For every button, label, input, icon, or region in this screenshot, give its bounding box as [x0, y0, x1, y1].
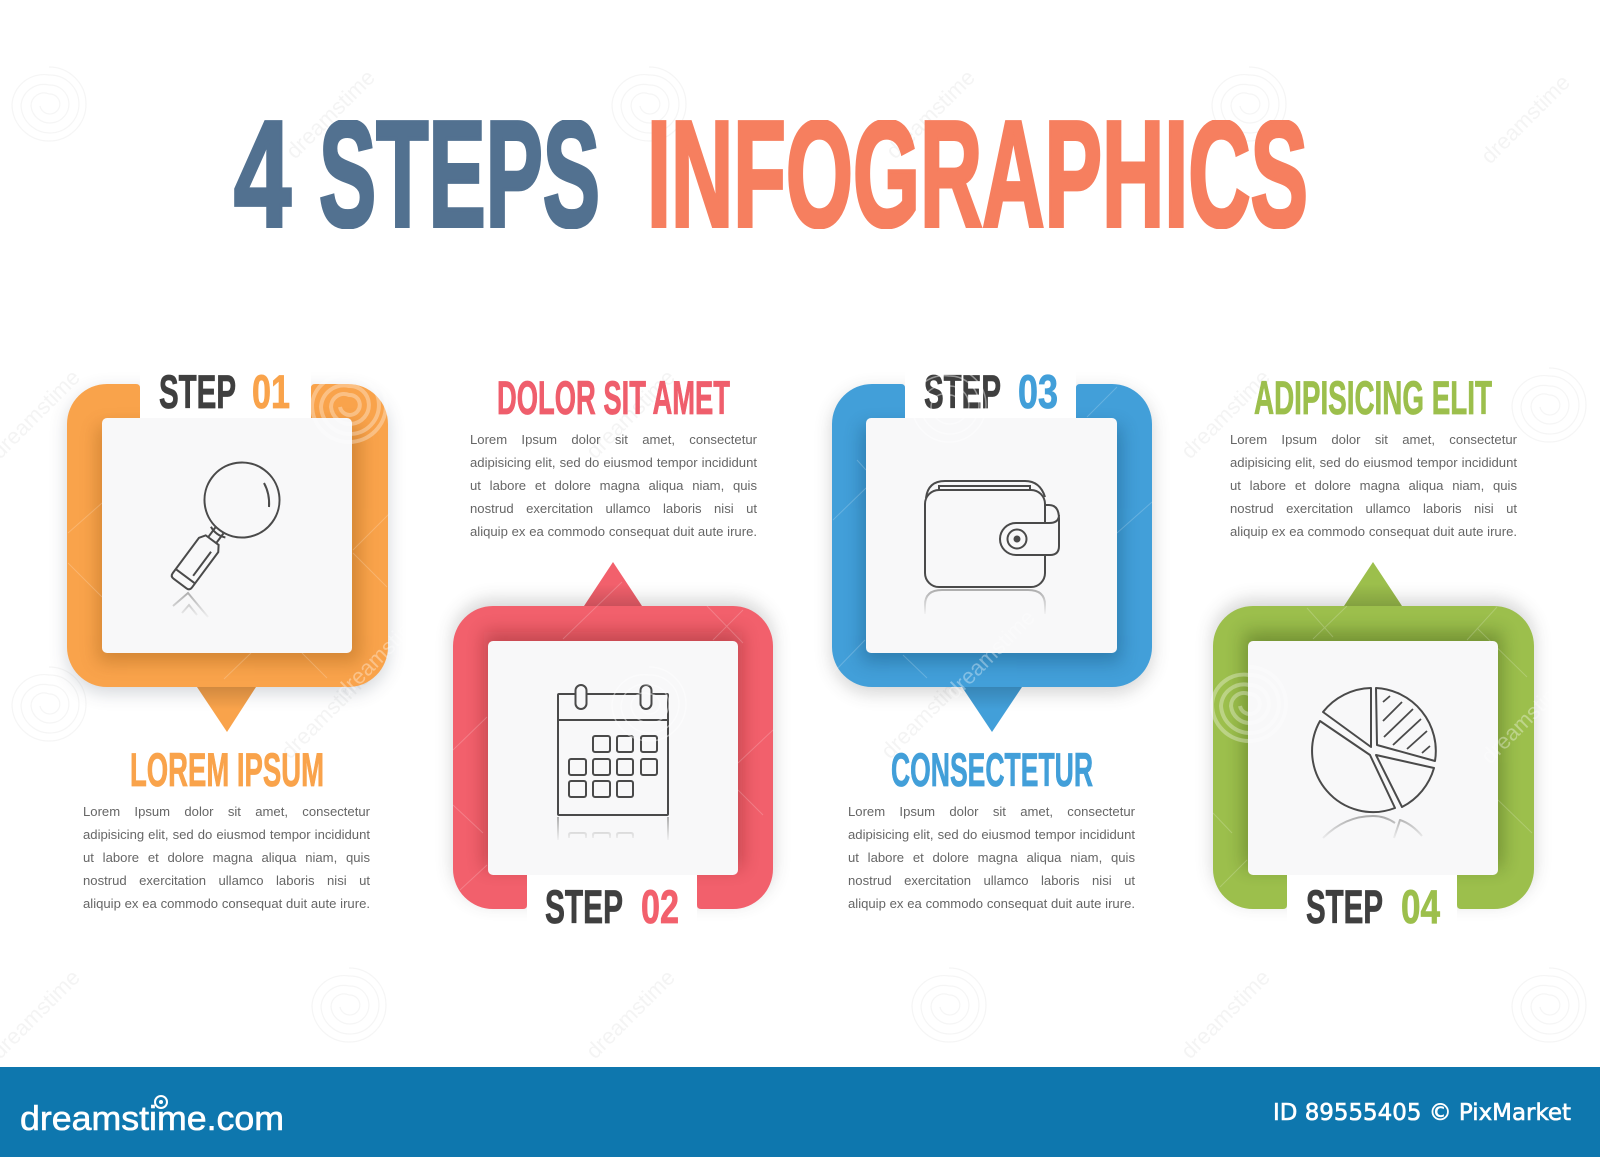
text block: lorem ipsum: Lorem Ipsum dolor sit amet, consectetur — [83, 804, 370, 819]
frame shadow — [832, 390, 1152, 693]
text block: consectetur: adipisicing elit, sed do eiusmod tempor incididunt — [848, 827, 1135, 842]
background watermark: dreamstime — [1176, 365, 1275, 464]
panel: step 4 — [1213, 562, 1534, 933]
heading: lorem ipsum: LOREM IPSUM — [130, 743, 324, 796]
title: STEPS — [319, 89, 600, 258]
background watermark: dreamstime — [581, 965, 680, 1064]
footer bar — [0, 1067, 1600, 1157]
title: 4 — [234, 89, 291, 258]
text block: adipisicing elit: nostrud exercitation ullamco laboris nisi ut — [1230, 501, 1517, 516]
icon: pie chart — [1312, 688, 1436, 838]
pointer — [1344, 562, 1402, 606]
footer credit: ID 89555405 © PixMarket — [1273, 1100, 1571, 1126]
title — [234, 120, 1306, 229]
text block: consectetur: aliquip ex ea commodo consequat duit aute irure. — [848, 896, 1135, 911]
card shadow — [1244, 632, 1502, 868]
text block: adipisicing elit: Lorem Ipsum dolor sit amet, consectetur — [1230, 432, 1517, 447]
icon: calendar — [558, 685, 668, 840]
background watermark: dreamstime — [876, 665, 975, 764]
frame — [1213, 606, 1534, 909]
overlay watermark: dreamstime — [941, 605, 1040, 704]
frame shadow — [67, 390, 388, 693]
overlay watermark: dreamstime — [1476, 670, 1575, 769]
background watermark: dreamstime — [281, 65, 380, 164]
overlay watermark: dreamstime — [331, 605, 430, 704]
text block: lorem ipsum — [83, 804, 370, 911]
text block: dolor sit amet: aliquip ex ea commodo consequat duit aute irure. — [470, 524, 757, 539]
footer logo: dreamstime.com — [20, 1100, 284, 1138]
step label: 01 — [252, 365, 290, 418]
step label: STEP — [545, 880, 623, 933]
icon: magnifying glass — [150, 448, 294, 617]
text block: consectetur: ut labore et dolore magna aliqua niam, quis — [848, 850, 1135, 865]
text block: dolor sit amet: ut labore et dolore magna aliqua niam, quis — [470, 478, 757, 493]
icon: wallet — [925, 481, 1059, 614]
text block: dolor sit amet: nostrud exercitation ullamco laboris nisi ut — [470, 501, 757, 516]
card shadow — [862, 426, 1121, 662]
text block: dolor sit amet: Lorem Ipsum dolor sit amet, consectetur — [470, 432, 757, 447]
text block: adipisicing elit — [1230, 432, 1517, 539]
text block: dolor sit amet — [470, 432, 757, 539]
background watermark: dreamstime — [1476, 70, 1575, 169]
overlay watermark — [68, 368, 1575, 890]
frame — [453, 606, 773, 909]
card — [102, 418, 352, 653]
card — [1248, 641, 1498, 875]
step label: STEP — [924, 365, 1001, 418]
heading: dolor sit amet: DOLOR SIT AMET — [497, 371, 730, 424]
card shadow — [484, 632, 742, 868]
frame shadow — [1213, 600, 1534, 903]
text block: lorem ipsum: aliquip ex ea commodo consequat duit aute irure. — [83, 896, 370, 911]
text block: adipisicing elit: aliquip ex ea commodo consequat duit aute irure. — [1230, 524, 1517, 539]
text block: dolor sit amet: adipisicing elit, sed do eiusmod tempor incididunt — [470, 455, 757, 470]
text block: lorem ipsum: ut labore et dolore magna aliqua niam, quis — [83, 850, 370, 865]
text block: consectetur: Lorem Ipsum dolor sit amet, consectetur — [848, 804, 1135, 819]
background watermark: dreamstime — [881, 65, 980, 164]
panel: step 2 — [453, 562, 773, 933]
step label: 03 — [1018, 365, 1058, 418]
text block: adipisicing elit: adipisicing elit, sed do eiusmod tempor incididunt — [1230, 455, 1517, 470]
frame — [67, 384, 388, 687]
text block: consectetur: nostrud exercitation ullamco laboris nisi ut — [848, 873, 1135, 888]
background watermark: dreamstime — [1176, 965, 1275, 1064]
background watermark: dreamstime — [276, 665, 375, 764]
frame shadow — [453, 600, 773, 903]
card — [866, 418, 1117, 653]
card — [488, 641, 738, 875]
pointer — [197, 687, 256, 732]
text block: lorem ipsum: nostrud exercitation ullamco laboris nisi ut — [83, 873, 370, 888]
panel: step 1 — [67, 360, 388, 732]
step label: STEP — [1306, 880, 1383, 933]
step label: 04 — [1401, 880, 1440, 933]
heading: consectetur: CONSECTETUR — [891, 743, 1093, 796]
panel: step 3 — [832, 360, 1152, 732]
frame — [832, 384, 1152, 687]
pointer — [962, 687, 1022, 732]
pointer — [584, 562, 642, 606]
text block: consectetur — [848, 804, 1135, 911]
text block: adipisicing elit: ut labore et dolore magna aliqua niam, quis — [1230, 478, 1517, 493]
background watermark: dreamstime — [581, 365, 680, 464]
text block: lorem ipsum: adipisicing elit, sed do eiusmod tempor incididunt — [83, 827, 370, 842]
step label: 02 — [641, 880, 679, 933]
card shadow — [98, 426, 360, 662]
step label: STEP — [159, 365, 236, 418]
